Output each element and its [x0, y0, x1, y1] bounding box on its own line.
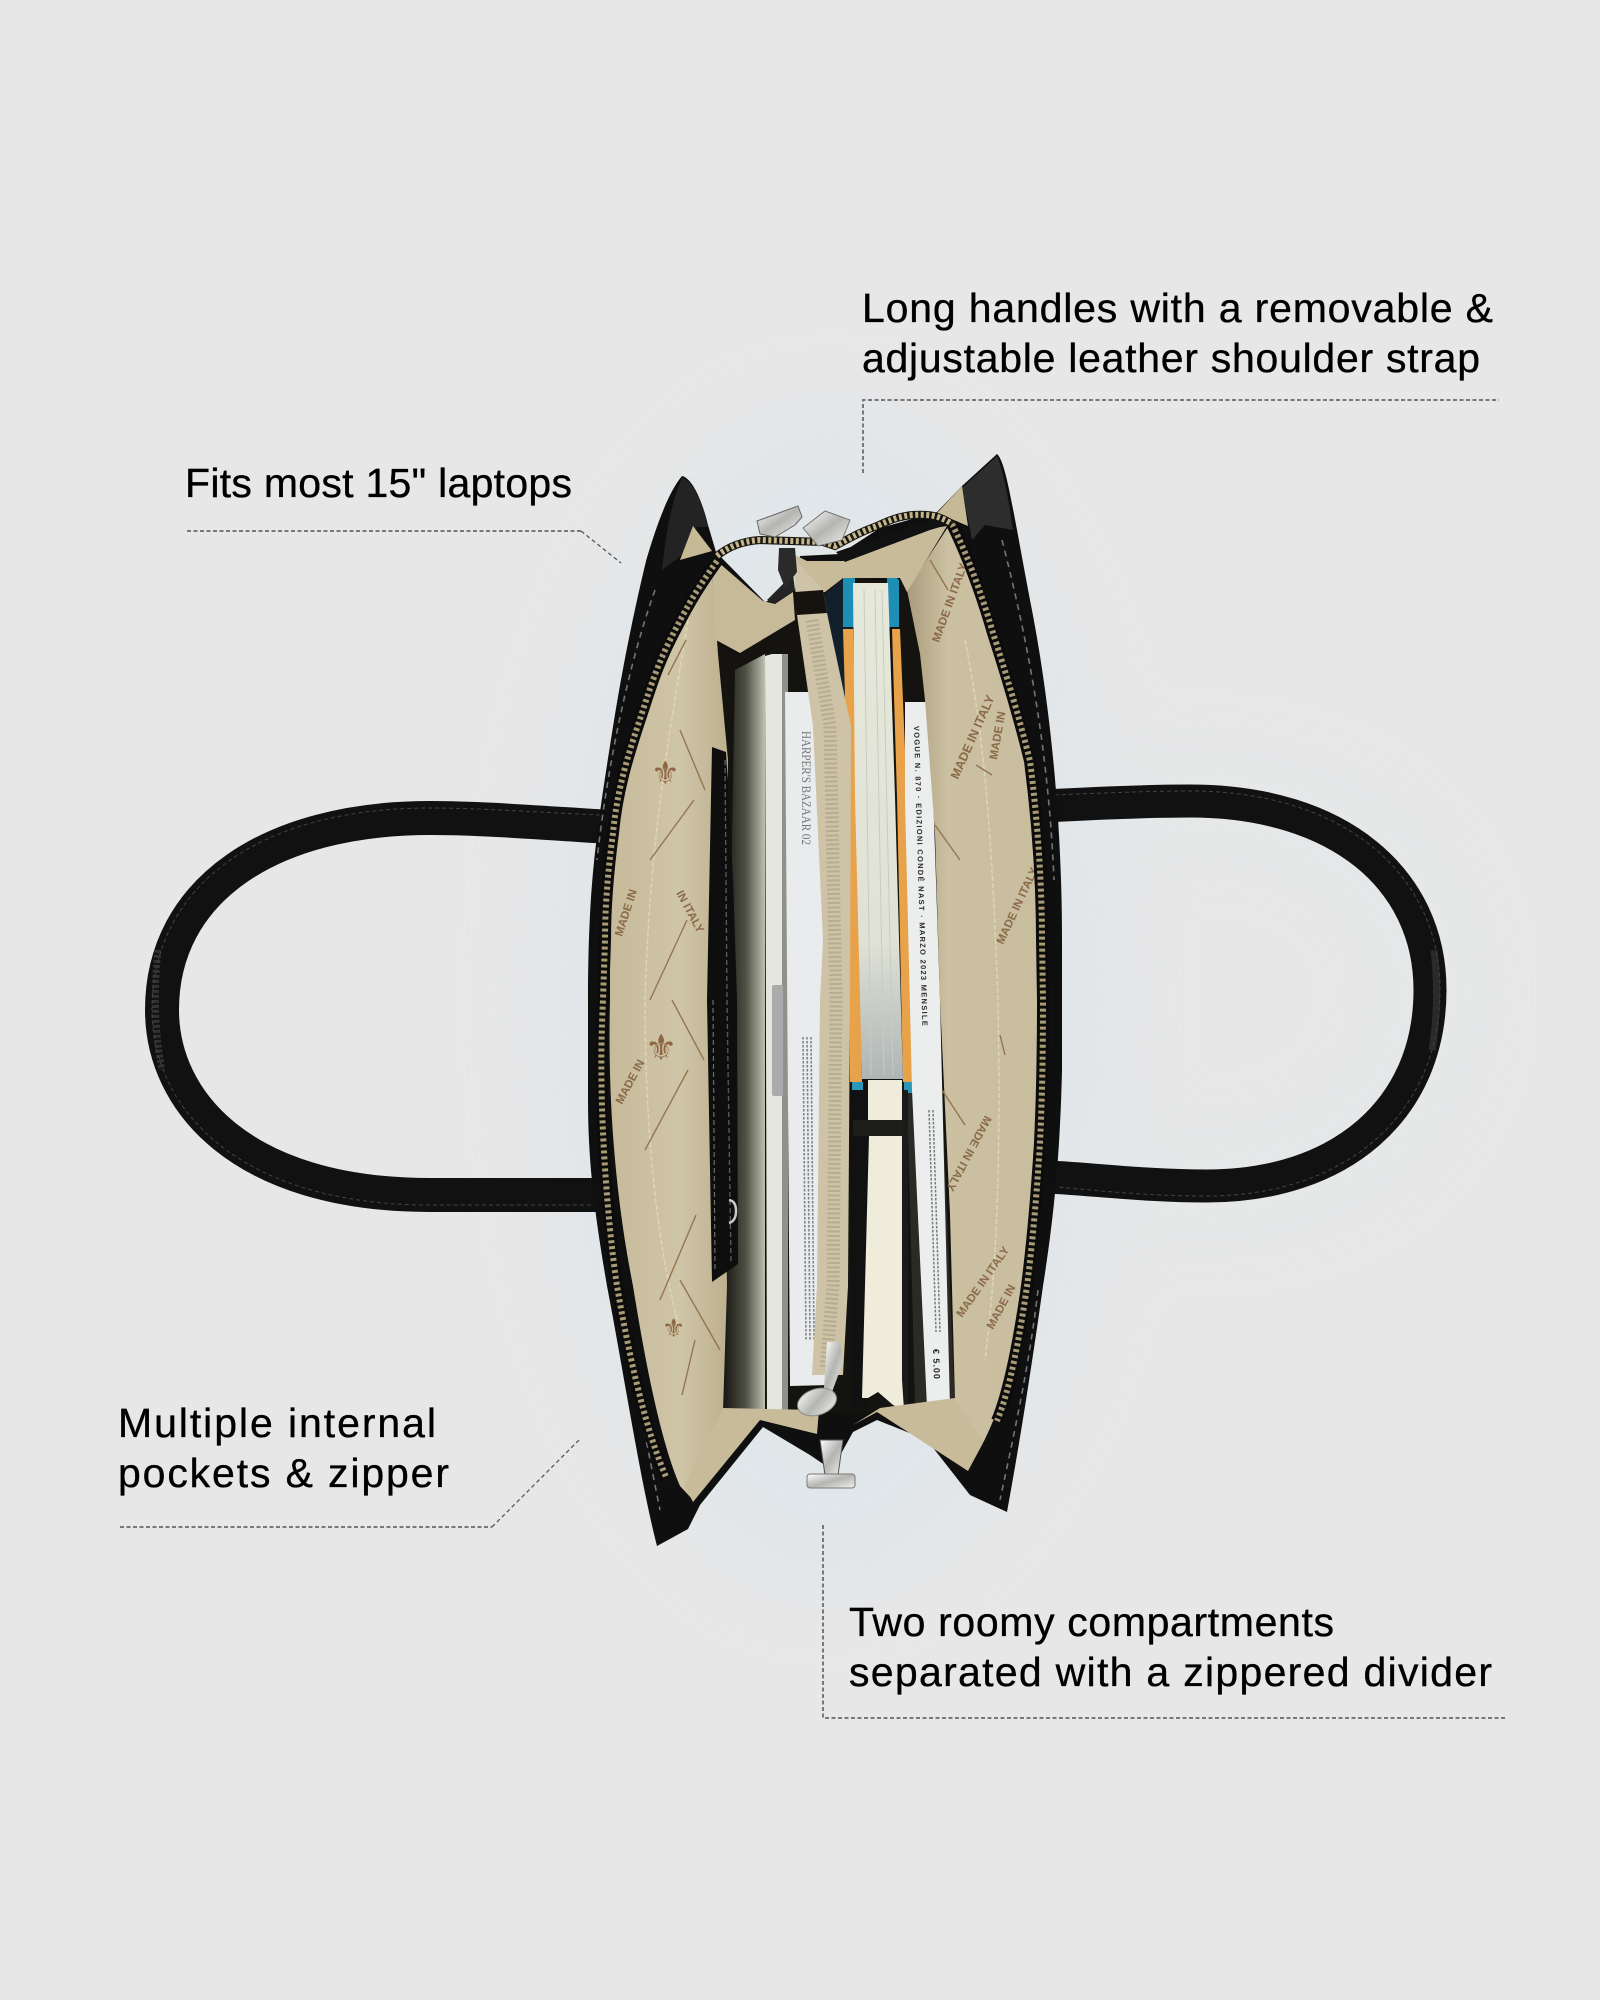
- callout: pockets: [118, 1400, 579, 1527]
- horn highlights: [662, 456, 1013, 570]
- leather stitching: [597, 540, 1054, 1510]
- bag: [588, 454, 1062, 1546]
- pocket zipper pull: [729, 1200, 736, 1223]
- lining seam: [645, 620, 688, 1330]
- callout: laptops: [185, 460, 621, 563]
- divider zipper: [793, 554, 851, 1375]
- black notebook: [850, 1080, 908, 1410]
- callout text: Fits most 15" laptops: [185, 460, 572, 506]
- callout: long handles: [862, 285, 1499, 473]
- lining logo marks: [930, 560, 1041, 1331]
- bottom lining flaps: [684, 1398, 983, 1502]
- lining logo marks: MADE IN: [988, 711, 1008, 761]
- divider top tab: [795, 590, 827, 615]
- lining logo marks: MADE IN ITALY: [943, 1114, 993, 1193]
- magazine small print: [929, 1110, 940, 1332]
- callout text: [849, 1599, 1492, 1695]
- bottom clasp: [807, 1440, 855, 1488]
- orange book: [820, 576, 915, 1093]
- leader line: [187, 531, 621, 563]
- right handle: [1045, 791, 1440, 1196]
- magazine spine text: VOGUE N. 870 · EDIZIONI CONDÉ NAST · MARZO 2023 MENSILE: [912, 726, 929, 1026]
- leader line: [863, 400, 1499, 473]
- top clasp: [757, 506, 850, 588]
- top lining flaps: [712, 520, 950, 653]
- left zipper: [601, 561, 717, 1479]
- lining logo marks: MADE IN: [985, 1283, 1018, 1331]
- top zipper arc: [717, 515, 952, 556]
- magazine small print: [803, 1037, 814, 1340]
- lining logo marks: [613, 640, 720, 1395]
- leader line: [823, 1525, 1507, 1718]
- left handle: [152, 808, 610, 1205]
- callout text: separated with a zippered divider: [849, 1649, 1492, 1695]
- right side shadow in cavity: [907, 1090, 955, 1410]
- magazine price: € 5.00: [931, 1349, 942, 1379]
- background glow around bag: [540, 410, 1430, 1590]
- lining logo marks: MADE IN ITALY: [931, 562, 970, 644]
- laptop: [722, 654, 788, 1418]
- callout text: [862, 285, 1493, 381]
- lining logo marks: MADE IN ITALY: [948, 692, 998, 781]
- callout text: adjustable leather shoulder strap: [862, 335, 1480, 381]
- callout text: [118, 1400, 449, 1496]
- lining logo marks: MADE IN ITALY: [955, 1245, 1012, 1320]
- lining logo marks: ⚜: [662, 1314, 685, 1344]
- lining logo marks: MADE IN ITALY: [995, 866, 1041, 946]
- lining logo marks: IN ITALY: [673, 889, 706, 935]
- callout text: Two roomy compartments: [849, 1599, 1334, 1645]
- lining logo marks: MADE IN: [614, 1058, 647, 1106]
- lining logo marks: ⚜: [645, 1028, 677, 1069]
- interior dark cavity: [705, 575, 960, 1412]
- lining logo marks: ⚜: [651, 754, 680, 792]
- callout: compartments: [823, 1525, 1507, 1718]
- magazine title: HARPER'S BAZAAR 02: [799, 731, 814, 845]
- lining seam: [965, 640, 999, 1360]
- callout text: pockets & zipper: [118, 1450, 449, 1496]
- right lining panel: [907, 524, 1042, 1443]
- leader line: [120, 1440, 579, 1527]
- magazine: Harper's Bazaar: [785, 692, 830, 1386]
- lining logo marks: MADE IN: [613, 888, 640, 938]
- left inner zip pocket: [707, 747, 738, 1282]
- callout text: Multiple internal: [118, 1400, 436, 1446]
- right zipper: [952, 524, 1043, 1421]
- callout text: Long handles with a removable &: [862, 285, 1493, 331]
- bag outer black body: [588, 454, 1062, 1546]
- divider zipper pull: [794, 1342, 843, 1421]
- left lining panel: [610, 570, 728, 1500]
- magazine: Vogue: [905, 702, 950, 1407]
